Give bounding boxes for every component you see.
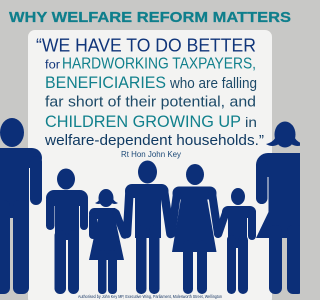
quote text: CHILDREN GROWING UP bbox=[45, 112, 241, 131]
title: WHY WELFARE REFORM MATTERS bbox=[9, 9, 291, 26]
figure: boy bbox=[218, 188, 256, 294]
figure: left man bbox=[0, 118, 42, 294]
family of figures bbox=[0, 118, 306, 294]
quote text: for bbox=[45, 60, 60, 72]
quote text: in bbox=[245, 114, 257, 130]
attribution: Rt Hon John Key bbox=[121, 149, 182, 159]
figure: man bbox=[46, 168, 88, 294]
quote text: HARDWORKING TAXPAYERS, bbox=[62, 56, 256, 72]
quote text: “WE HAVE TO DO BETTER bbox=[36, 34, 256, 56]
figure: girl bbox=[89, 189, 124, 294]
quote text bbox=[36, 34, 264, 149]
quote text: far short of their potential, and bbox=[45, 94, 256, 110]
quote text: who are falling bbox=[169, 76, 257, 92]
quote text: BENEFICIARIES bbox=[45, 73, 166, 92]
footer authorisation line: Authorised by John Key MP, Executive Wing, Parliament, Molesworth Street, Wellington bbox=[78, 294, 222, 299]
figure: father bbox=[125, 160, 170, 294]
figure: mother bbox=[172, 164, 218, 294]
panel: quote background bbox=[28, 30, 272, 300]
figure: right woman bbox=[256, 122, 306, 294]
quote text: welfare-dependent households.” bbox=[44, 132, 264, 149]
